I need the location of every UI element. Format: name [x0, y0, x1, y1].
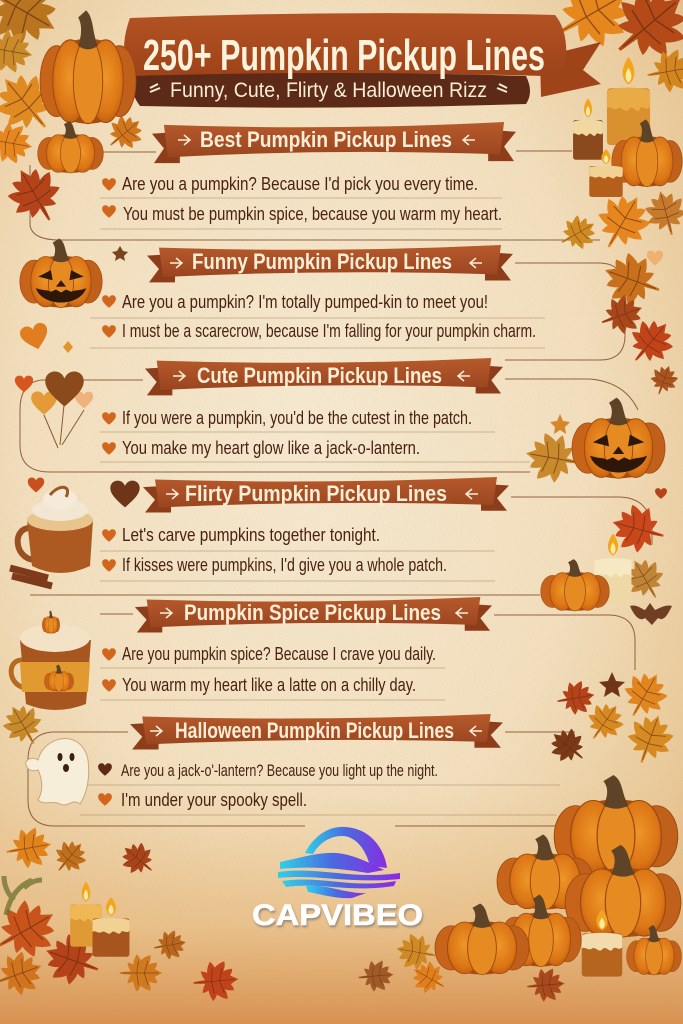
subtitle ribbon [132, 73, 530, 108]
panel: cute pumpkin pickup lines: If you were a pumpkin, you'd be the cutest in the patch. [122, 408, 472, 428]
icon: ghost [26, 739, 89, 805]
panel: halloween pumpkin pickup lines: I'm under your spooky spell. [121, 790, 307, 810]
panel: flirty pumpkin pickup lines: If kisses were pumpkins, I'd give you a whole patch. [122, 555, 447, 575]
panel: funny pumpkin pickup lines: Are you a pumpkin? I'm totally pumped-kin to meet you! [122, 292, 488, 312]
panel: funny pumpkin pickup lines [90, 245, 545, 348]
panel: best pumpkin pickup lines: Best Pumpkin Pickup Lines [200, 127, 452, 152]
panel: pumpkin spice pickup lines: Are you pumpkin spice? Because I crave you daily. [122, 644, 436, 664]
panel: flirty pumpkin pickup lines: Let's carve pumpkins together tonight. [122, 525, 380, 545]
candle and pumpkin cluster right [541, 533, 631, 611]
panel: halloween pumpkin pickup lines [80, 714, 560, 815]
panel: funny pumpkin pickup lines: Funny Pumpkin Pickup Lines [192, 249, 452, 274]
panel: pumpkin spice pickup lines: You warm my heart like a latte on a chilly day. [122, 675, 416, 695]
icon: hot cocoa with cinnamon [10, 487, 93, 586]
candles top right [573, 57, 682, 197]
title banner [124, 13, 601, 108]
pumpkins and jack-o-lanterns [20, 10, 665, 478]
panel: cute pumpkin pickup lines [100, 358, 530, 462]
panel: pumpkin spice pickup lines: Pumpkin Spice Pickup Lines [184, 600, 441, 625]
icon: bat [630, 603, 672, 625]
panel: best pumpkin pickup lines: Are you a pumpkin? Because I'd pick you every time. [122, 174, 478, 194]
hearts, stars and sparkles [15, 246, 667, 697]
subtitle ribbon: Funny, Cute, Flirty & Halloween Rizz [170, 79, 487, 102]
panel: halloween pumpkin pickup lines: Are you a jack-o'-lantern? Because you light up the night. [121, 761, 438, 780]
icon: heart balloons [31, 372, 93, 448]
bottom-left candles [70, 881, 129, 957]
logo: Capvibeo: CAPVIBEO [252, 899, 423, 932]
panel: pumpkin spice pickup lines [100, 597, 492, 700]
frame: section connectors [20, 151, 652, 826]
panel: best pumpkin pickup lines: You must be pumpkin spice, because you warm my heart. [123, 204, 502, 224]
panel: best pumpkin pickup lines [100, 122, 516, 229]
panel: cute pumpkin pickup lines: Cute Pumpkin Pickup Lines [197, 363, 442, 388]
panel: flirty pumpkin pickup lines: Flirty Pumpkin Pickup Lines [185, 481, 447, 506]
pumpkin pile bottom right [435, 775, 681, 977]
icon: pumpkin spice latte [11, 610, 91, 710]
logo: Capvibeo [252, 827, 423, 932]
panel: funny pumpkin pickup lines: I must be a scarecrow, because I'm falling for your pumpkin charm. [122, 321, 536, 341]
panel: cute pumpkin pickup lines: You make my heart glow like a jack-o-lantern. [122, 438, 420, 458]
panel: halloween pumpkin pickup lines: Halloween Pumpkin Pickup Lines [175, 718, 454, 743]
panel: flirty pumpkin pickup lines [100, 477, 509, 581]
